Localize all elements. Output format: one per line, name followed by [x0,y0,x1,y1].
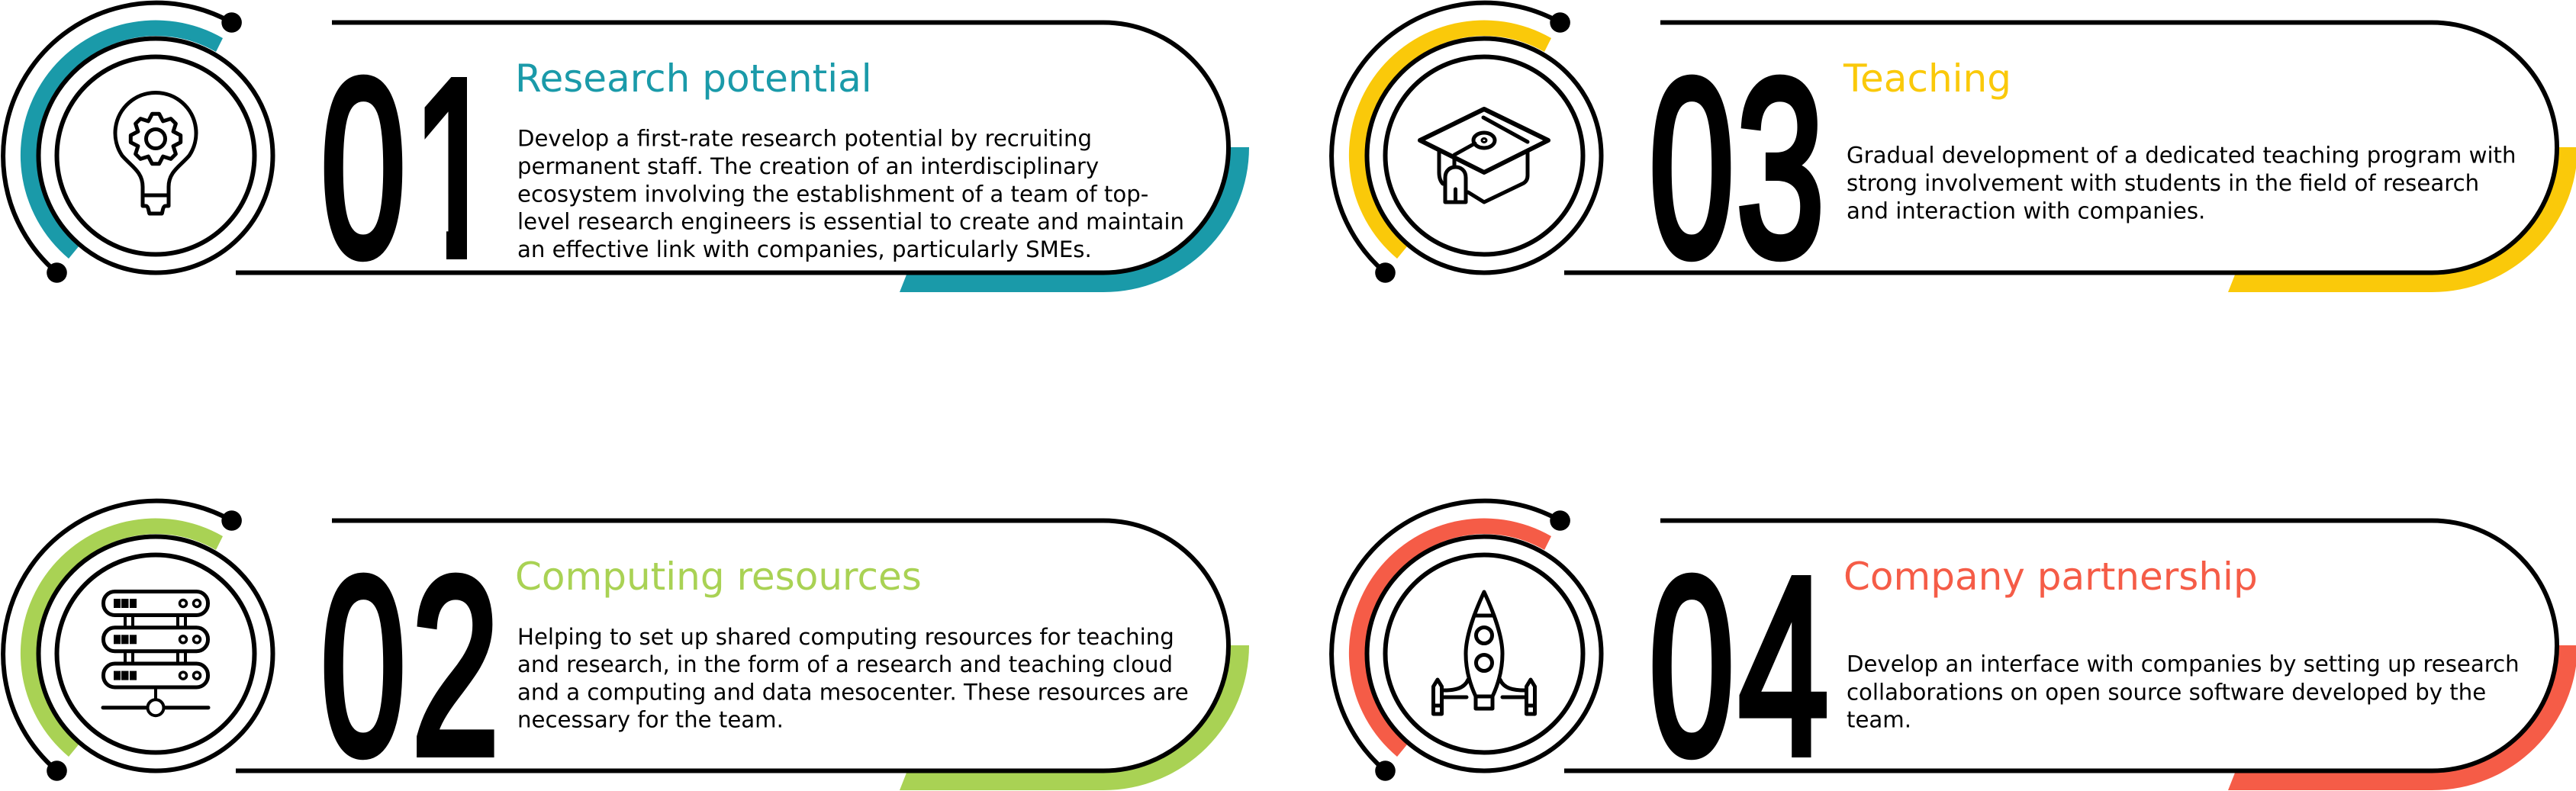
number 01 [324,75,467,262]
panel: 02 computing resources [3,501,1249,791]
icon: light bulb with gear [115,92,196,214]
number 01: 0 [321,27,405,308]
heading: Computing resources [515,555,922,599]
body text: strong involvement with students in the field of research [1847,170,2479,196]
number 02 [321,525,499,791]
body text: level research engineers is essential to create and maintain [517,209,1184,235]
body text: ecosystem involving the establishment of a team of top- [517,181,1148,207]
accent: yellow corner swoosh [2228,147,2576,292]
panel: 01 research potential [3,3,1249,308]
body text: and a computing and data mesocenter. These resources are [517,679,1189,705]
body text: permanent staff. The creation of an interdisciplinary [517,153,1099,179]
number 04 [1650,525,1828,791]
body text: and interaction with companies. [1847,198,2205,224]
orbit arc with end dots [1331,501,1570,781]
panel: 04 company partnership [1331,501,2576,791]
accent: green corner swoosh [900,645,1249,790]
body text: necessary for the team. [517,707,784,733]
orbit arc with end dots [3,3,242,283]
body text: Develop an interface with companies by setting up research [1847,651,2520,677]
text pill outline [236,520,1228,770]
body text: Gradual development of a dedicated teaching program with [1847,142,2516,168]
text pill outline [1564,520,2557,770]
body text: and research, in the form of a research and teaching cloud [517,651,1173,677]
icon: graduation cap [1420,109,1548,202]
panel: 03 teaching [1331,3,2576,309]
body text [1847,651,2520,733]
accent: red arc [1349,519,1551,757]
orbit arc with end dots [3,501,242,781]
heading: Teaching [1843,56,2011,101]
icon: server rack [103,592,208,715]
orbit arc with end dots [1331,3,1570,283]
accent: red corner swoosh [2228,645,2576,790]
body text [517,126,1184,262]
number 03: 0 [1650,27,1734,308]
text pill outline [236,23,1228,273]
body text: Helping to set up shared computing resources for teaching [517,624,1174,650]
double ring [38,537,273,770]
body text: collaborations on open source software developed by the [1847,679,2486,705]
accent: green arc [21,519,223,757]
number 03 [1650,27,1824,309]
body text [1847,142,2516,224]
text pill outline [1564,23,2557,273]
accent: teal corner swoosh [900,147,1249,292]
heading: Company partnership [1843,555,2258,599]
double ring [1367,38,1601,273]
body text: an effective link with companies, particularly SMEs. [517,236,1092,262]
body text: Develop a first-rate research potential by recruiting [517,126,1092,152]
accent: yellow arc [1349,21,1551,259]
heading: Research potential [515,56,872,101]
body text [517,624,1189,733]
icon: rocket [1433,592,1535,714]
number 01: 1 [413,27,497,308]
body text: team. [1847,707,1911,733]
double ring [38,38,273,273]
number 03: 3 [1737,27,1824,309]
double ring [1367,537,1601,770]
accent: teal arc [21,21,223,259]
